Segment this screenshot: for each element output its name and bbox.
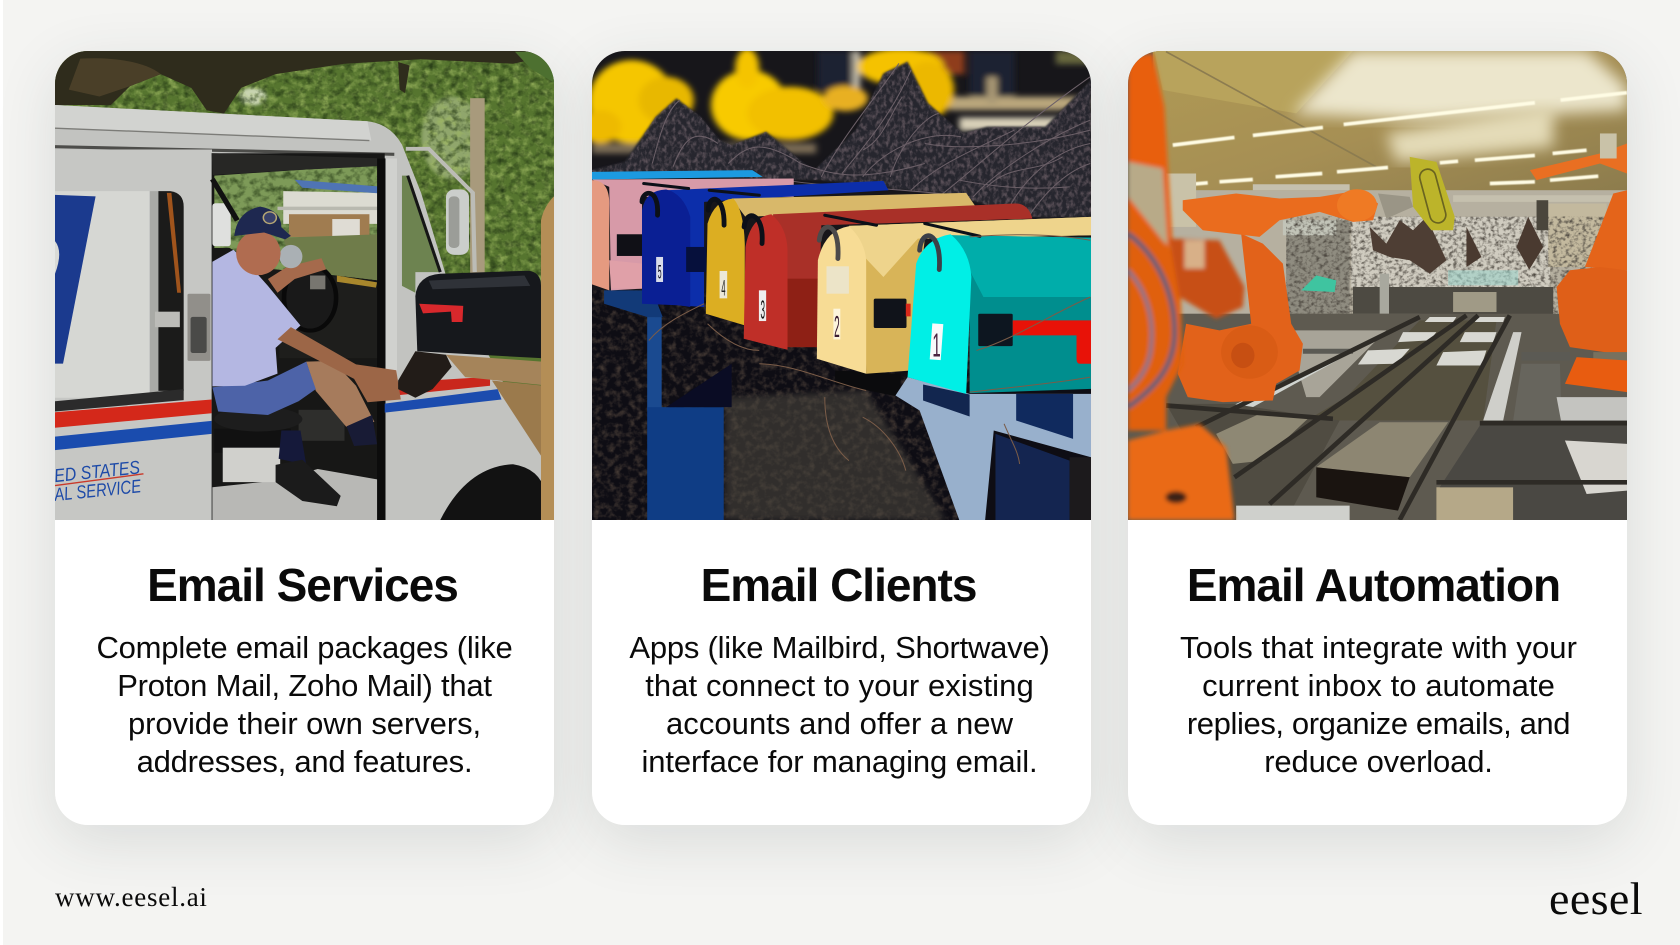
mirror [406, 149, 475, 272]
truck lettering [52, 457, 143, 506]
photo: mail carrier in postal truck [55, 51, 554, 520]
conveyor [1128, 314, 1627, 520]
description: Email Services: Proton Mail, Zoho Mail) that [117, 668, 492, 703]
heading: Email Automation: Email Automation [1187, 559, 1560, 611]
description: Email Services: addresses, and features. [137, 744, 472, 779]
door handle [188, 294, 210, 361]
heading: Email Clients: Email Clients [701, 559, 976, 611]
mailbox 4: yellow [706, 193, 976, 325]
description: Email Automation [1180, 630, 1577, 779]
mailbox 2: pale yellow [817, 217, 1091, 374]
description: Email Automation: reduce overload. [1264, 744, 1493, 779]
footer url: www.eesel.ai [55, 882, 208, 912]
description: Email Services [96, 630, 513, 779]
mail carrier [212, 207, 401, 506]
mailbox latches [642, 184, 980, 270]
mailbox 1: teal: 1 [932, 328, 941, 364]
roadside mailbox and post [398, 196, 554, 520]
description: Email Automation: current inbox to automate [1202, 668, 1555, 703]
description: Email Automation: replies, organize emails, and [1187, 706, 1570, 741]
main robot arm [1178, 189, 1413, 402]
mailbox 5: blue: 5 [658, 263, 661, 284]
mailbox 4: yellow: 4 [721, 275, 725, 301]
lower background [592, 290, 1091, 520]
panel: Email Services [55, 51, 554, 825]
panel: Email Automation [1128, 51, 1627, 825]
dashboard and wheel [279, 265, 379, 358]
mailbox 5: blue [642, 181, 889, 307]
truck lettering: AL SERVICE [55, 476, 143, 506]
right robot [1530, 133, 1627, 392]
seat and step [212, 407, 377, 520]
description: Email Clients [629, 630, 1050, 779]
description: Email Clients: interface for managing email. [642, 744, 1038, 779]
description: Email Clients: that connect to your existing [645, 668, 1034, 703]
photo: row of colourful numbered mailboxes [592, 51, 1091, 520]
mailbox 1: teal [908, 234, 1091, 394]
description: Email Services: Complete email packages (like [96, 630, 513, 665]
description: Email Automation: Tools that integrate with your [1180, 630, 1577, 665]
description: Email Clients: accounts and offer a new [666, 706, 1013, 741]
logo wordmark: eesel [1549, 873, 1643, 924]
photo: orange robot arms on factory line [1128, 51, 1627, 520]
wheel [440, 464, 546, 520]
twigs [652, 63, 1090, 217]
yellow gripper [1410, 157, 1455, 230]
mailbox 2: pale yellow: 2 [834, 309, 840, 344]
panel: Email Clients [592, 51, 1091, 825]
mailbox 3: red: 3 [760, 297, 765, 325]
back equipment [1166, 174, 1627, 337]
description: Email Services: provide their own servers, [128, 706, 481, 741]
description: Email Clients: Apps (like Mailbird, Shortwave) [629, 630, 1050, 665]
mailbox 6: pink [592, 170, 794, 290]
ceiling lights [1169, 93, 1627, 186]
heading: Email Services: Email Services [147, 559, 458, 611]
ceiling [1153, 51, 1627, 205]
foreground twigs [649, 235, 1090, 471]
truck lettering: ED STATES [55, 457, 141, 487]
foreground robot [1128, 53, 1244, 520]
mailbox 3: red [744, 204, 1032, 350]
